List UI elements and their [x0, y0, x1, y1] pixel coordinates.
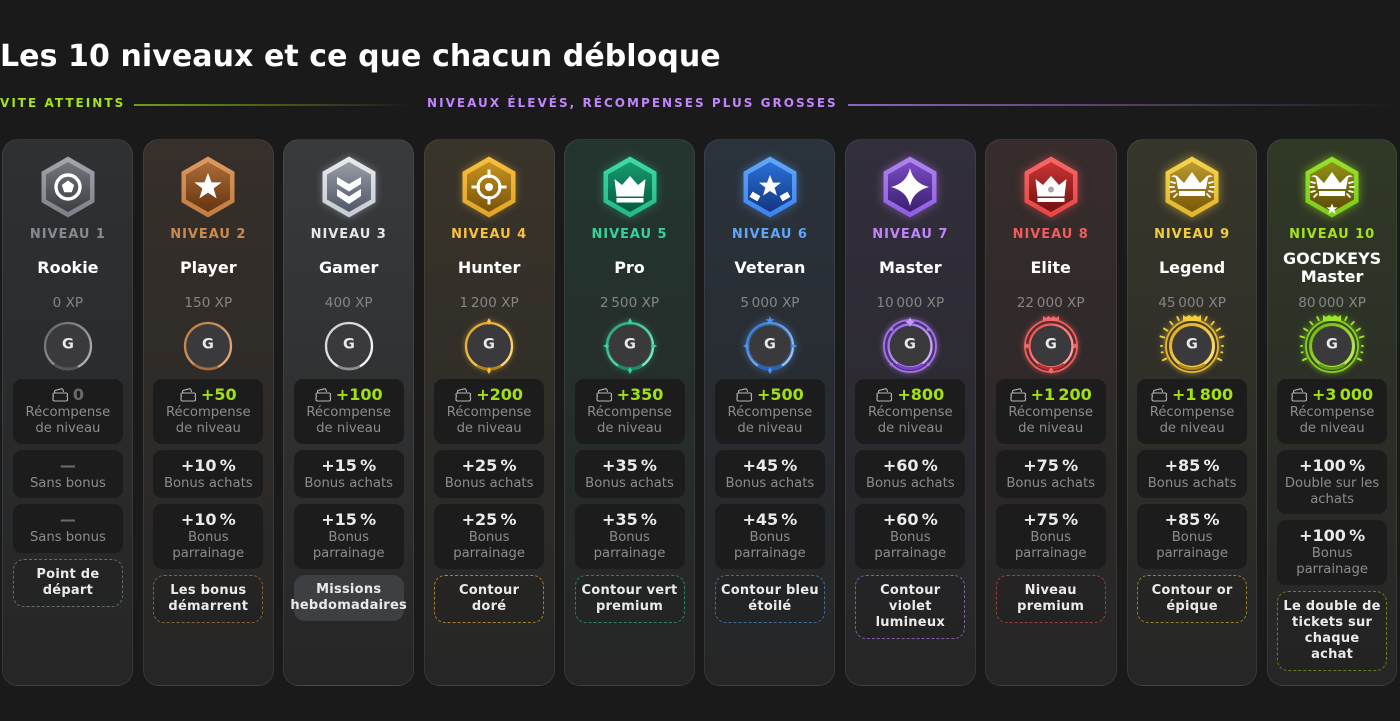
panel: niveau 6 [704, 139, 835, 686]
perk tag: lumineux [876, 614, 945, 630]
referral bonus: parrainage [172, 546, 244, 561]
referral bonus [13, 504, 123, 552]
name: Rookie [37, 258, 99, 276]
referral bonus: +85 % [1165, 510, 1220, 529]
reward [996, 379, 1106, 444]
perk tag: étoilé [748, 598, 791, 614]
purchase bonus [294, 450, 404, 498]
icon: badge niveau 7 [878, 152, 942, 222]
reward: +3 000 [1312, 385, 1373, 404]
reward [294, 379, 404, 444]
reward: de niveau [316, 421, 381, 436]
perk tag [294, 574, 404, 620]
name: Master [1301, 266, 1363, 286]
referral bonus: +15 % [321, 510, 376, 529]
xp: 22 000 XP [1017, 295, 1085, 311]
stats [434, 379, 544, 623]
level label: NIVEAU 5 [591, 226, 668, 242]
reward [434, 379, 544, 444]
perk tag: Contour bleu [721, 582, 819, 598]
icon: ring niveau 7: G [904, 336, 916, 352]
icon: ring niveau 3: G [343, 336, 355, 352]
reward: de niveau [457, 421, 522, 436]
reward: de niveau [35, 421, 100, 436]
purchase bonus: Bonus achats [585, 476, 674, 490]
section label: vite atteints: VITE ATTEINTS [0, 96, 125, 110]
panel: niveau 3 [283, 139, 414, 686]
purchase bonus [996, 450, 1106, 498]
purchase bonus: Bonus achats [866, 476, 955, 490]
perk tag: Missions [316, 582, 381, 596]
referral bonus [715, 504, 825, 568]
perk tag [574, 574, 684, 622]
xp: 2 500 XP [600, 295, 659, 311]
purchase bonus [855, 450, 965, 498]
reward [855, 379, 965, 444]
name: Elite [1030, 258, 1071, 276]
referral bonus [996, 504, 1106, 568]
perk tag: Contour vert [582, 582, 677, 598]
perk tag: démarrent [168, 598, 248, 614]
reward: +200 [476, 385, 523, 404]
referral bonus: Bonus [890, 530, 931, 545]
referral bonus [1277, 520, 1387, 584]
panel: niveau 2 [143, 139, 274, 686]
panel: niveau 4 [424, 139, 555, 686]
icon: ring niveau 3 [324, 322, 374, 370]
panel: niveau 5 [564, 139, 695, 686]
icon: badge niveau 4 [458, 154, 520, 220]
stats [290, 379, 407, 621]
icon: badge niveau 3 [318, 154, 380, 220]
perk tag [996, 574, 1106, 622]
purchase bonus [434, 450, 544, 498]
reward: +100 [336, 385, 383, 404]
purchase bonus: Bonus achats [304, 476, 393, 490]
icon: badge niveau 2 [182, 156, 234, 218]
reward: Récompense [166, 405, 251, 420]
icon: badge niveau 10 [1299, 152, 1365, 222]
referral bonus: Bonus [469, 530, 509, 545]
referral bonus: Bonus [188, 530, 229, 545]
level label: NIVEAU 1 [30, 226, 106, 242]
reward: Récompense [1290, 405, 1374, 420]
purchase bonus: +100 % [1299, 456, 1365, 474]
referral bonus [434, 504, 544, 568]
referral bonus [574, 504, 684, 568]
level label: NIVEAU 10 [1289, 226, 1375, 242]
reward: de niveau [1300, 421, 1365, 436]
icon: badge niveau 6 [738, 152, 802, 222]
referral bonus: +75 % [1023, 510, 1078, 529]
referral bonus: Bonus [1030, 530, 1071, 545]
reward [13, 379, 123, 444]
referral bonus: parrainage [1015, 546, 1087, 561]
icon: ring niveau 9 [1158, 312, 1226, 376]
purchase bonus: +15 % [321, 456, 376, 474]
reward: Récompense [728, 405, 812, 420]
level label: NIVEAU 7 [872, 226, 948, 242]
panel: niveau 1 [2, 139, 133, 686]
purchase bonus [153, 450, 263, 498]
reward [1137, 379, 1247, 444]
stats [13, 379, 123, 607]
referral bonus: parrainage [594, 546, 665, 561]
purchase bonus [1277, 450, 1387, 514]
referral bonus: +35 % [602, 510, 657, 529]
level label: NIVEAU 2 [170, 226, 246, 242]
icon: ring niveau 5: G [624, 336, 635, 352]
referral bonus: Bonus [1172, 530, 1212, 545]
stats [575, 379, 685, 623]
perk tag [434, 574, 544, 622]
level label: NIVEAU 9 [1154, 226, 1230, 242]
referral bonus: parrainage [734, 546, 806, 561]
perk tag: violet [889, 598, 932, 614]
icon: ring niveau 4 [462, 317, 516, 375]
referral bonus: +10 % [181, 510, 236, 529]
section label: niveaux élevés: NIVEAUX ÉLEVÉS, RÉCOMPENSES PLUS GROSSES [427, 96, 838, 110]
stats [1277, 379, 1387, 671]
xp: 5 000 XP [740, 295, 799, 311]
perk tag [13, 558, 123, 606]
icon: ring niveau 1 [44, 322, 92, 370]
name: Master [879, 258, 942, 276]
referral bonus: parrainage [874, 546, 946, 561]
perk tag: tickets sur [1292, 614, 1372, 630]
reward [715, 379, 825, 444]
purchase bonus: Bonus achats [1148, 476, 1236, 490]
perk tag: chaque [1305, 630, 1359, 646]
xp: 10 000 XP [876, 295, 944, 311]
purchase bonus: Sans bonus [30, 476, 106, 490]
xp: 150 XP [184, 295, 232, 311]
level label: NIVEAU 4 [451, 226, 527, 242]
reward [153, 379, 263, 444]
referral bonus [1137, 504, 1247, 568]
reward: 0 [73, 385, 84, 404]
purchase bonus: Double sur les [1285, 476, 1379, 490]
referral bonus: Bonus [328, 530, 369, 545]
icon: badge niveau 1 [42, 156, 94, 218]
level label: NIVEAU 6 [732, 226, 808, 242]
xp: 80 000 XP [1298, 295, 1366, 311]
perk tag: doré [472, 598, 506, 614]
referral bonus: Bonus [1312, 546, 1352, 561]
icon: ring niveau 2: G [202, 336, 214, 352]
level label: NIVEAU 3 [311, 226, 387, 242]
stats [996, 379, 1106, 623]
perk tag: départ [43, 582, 93, 598]
referral bonus: parrainage [453, 546, 525, 561]
reward: Récompense [26, 405, 110, 420]
icon: ring niveau 6 [740, 314, 800, 376]
purchase bonus [13, 450, 123, 498]
reward: de niveau [878, 421, 943, 436]
reward: +1 800 [1172, 385, 1233, 404]
referral bonus: +25 % [462, 510, 517, 529]
reward: Récompense [1150, 405, 1234, 420]
reward: Récompense [447, 405, 531, 420]
purchase bonus [715, 450, 825, 498]
purchase bonus: +75 % [1023, 456, 1078, 474]
perk tag [1137, 574, 1247, 622]
xp: 400 XP [325, 295, 373, 311]
referral bonus [294, 504, 404, 568]
reward: de niveau [176, 421, 241, 436]
referral bonus: parrainage [313, 546, 385, 561]
panel: niveau 8 [985, 139, 1117, 686]
referral bonus: Bonus [750, 530, 790, 545]
purchase bonus: Bonus achats [726, 476, 814, 490]
reward: +350 [617, 385, 663, 404]
perk tag: achat [1311, 646, 1353, 662]
perk tag: Niveau [1025, 582, 1077, 598]
xp: 45 000 XP [1158, 295, 1226, 311]
reward: +1 200 [1031, 385, 1092, 404]
purchase bonus [1137, 450, 1247, 498]
icon: badge niveau 9 [1159, 152, 1225, 222]
icon: ring niveau 6: G [764, 336, 776, 352]
xp: 1 200 XP [460, 295, 519, 311]
referral bonus: parrainage [1156, 546, 1228, 561]
stats [1137, 379, 1247, 623]
purchase bonus: — [60, 456, 76, 474]
icon: ring niveau 10 [1298, 312, 1366, 376]
reward: Récompense [587, 405, 672, 420]
xp: 0 XP [53, 295, 83, 311]
reward: de niveau [737, 421, 802, 436]
icon: ring niveau 7 [879, 315, 941, 376]
panel: niveau 9 [1127, 139, 1257, 686]
perk tag [715, 574, 825, 622]
reward: +500 [757, 385, 804, 404]
perk tag: épique [1166, 598, 1218, 614]
perk tag: Le double de [1283, 598, 1381, 614]
name: Veteran [734, 258, 805, 276]
name: Hunter [458, 258, 520, 276]
stats [855, 379, 965, 639]
reward [574, 379, 684, 444]
purchase bonus: +25 % [462, 456, 517, 474]
perk tag: Contour [880, 582, 940, 598]
name: Pro [614, 258, 645, 276]
perk tag: premium [596, 598, 663, 614]
icon: badge niveau 5 [598, 153, 662, 221]
panel: niveau 10 [1267, 139, 1397, 686]
referral bonus: +45 % [742, 510, 797, 529]
perk tag [153, 574, 263, 622]
perk tag: Contour or [1152, 582, 1233, 598]
referral bonus: +60 % [883, 510, 938, 529]
panel: niveau 7 [845, 139, 976, 686]
perk tag: hebdomadaires [290, 598, 407, 612]
icon: ring niveau 5 [602, 317, 658, 375]
stats [153, 379, 263, 623]
reward: de niveau [1160, 421, 1225, 436]
purchase bonus: Bonus achats [1006, 476, 1095, 490]
referral bonus [153, 504, 263, 568]
reward: de niveau [1018, 421, 1083, 436]
icon: ring niveau 4: G [483, 336, 495, 352]
icon: ring niveau 9: G [1186, 336, 1198, 352]
referral bonus: — [60, 510, 76, 529]
reward: +50 [201, 385, 237, 404]
title: Les 10 niveaux et ce que chacun débloque [0, 39, 721, 74]
icon: ring niveau 8 [1020, 313, 1082, 377]
perk tag: premium [1017, 598, 1084, 614]
level label: NIVEAU 8 [1013, 226, 1089, 242]
icon: ring niveau 8: G [1045, 336, 1057, 352]
referral bonus [855, 504, 965, 568]
icon: ring niveau 10: G [1326, 336, 1338, 352]
purchase bonus [574, 450, 684, 498]
referral bonus: +100 % [1299, 526, 1365, 545]
name: GOCDKEYS [1283, 248, 1381, 268]
perk tag: Les bonus [170, 582, 246, 598]
purchase bonus: +45 % [742, 456, 797, 474]
reward: Récompense [306, 405, 391, 420]
reward: Récompense [868, 405, 953, 420]
stats [715, 379, 825, 623]
purchase bonus: achats [1310, 492, 1354, 506]
referral bonus: parrainage [1296, 562, 1368, 577]
perk tag [855, 574, 965, 638]
purchase bonus: +60 % [883, 456, 938, 474]
name: Player [180, 258, 237, 276]
icon: badge niveau 8 [1018, 152, 1084, 222]
icon: ring niveau 2 [184, 322, 232, 370]
reward: +800 [897, 385, 944, 404]
reward: Récompense [1008, 405, 1093, 420]
referral bonus: Bonus [609, 530, 650, 545]
perk tag: Contour [459, 582, 519, 598]
perk tag: Point de [36, 566, 99, 582]
name: Gamer [319, 258, 378, 276]
purchase bonus: +35 % [602, 456, 657, 474]
purchase bonus: +10 % [181, 456, 236, 474]
reward [1277, 379, 1387, 444]
name [1283, 248, 1381, 286]
purchase bonus: Bonus achats [164, 476, 253, 490]
purchase bonus: Bonus achats [445, 476, 533, 490]
referral bonus: Sans bonus [30, 530, 106, 545]
purchase bonus: +85 % [1165, 456, 1220, 474]
name: Legend [1159, 258, 1225, 276]
icon: ring niveau 1: G [62, 336, 74, 352]
perk tag [1277, 590, 1387, 670]
reward: de niveau [597, 421, 662, 436]
